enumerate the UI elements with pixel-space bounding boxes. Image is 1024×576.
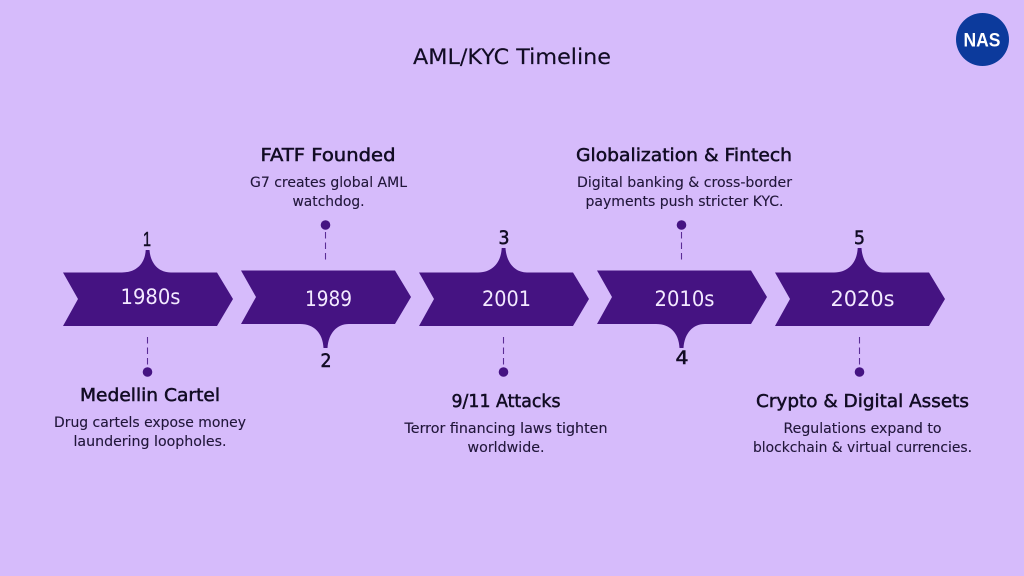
milestone 3: 2001	[403, 228, 608, 456]
arrow 4 with bottom tab	[597, 270, 767, 348]
milestone 2: 1989	[241, 146, 411, 372]
connector 1	[143, 337, 152, 377]
text: Medellin Cartel description: laundering loopholes.	[74, 434, 226, 450]
text: Medellin Cartel description: Drug cartels expose money	[54, 415, 246, 431]
arrow 1 with top tab	[63, 250, 233, 326]
heading: Globalization & Fintech: Globalization & Fintech	[576, 146, 792, 166]
text: FATF description: G7 creates global AML	[250, 175, 407, 191]
text: Crypto description: blockchain & virtual currencies.	[753, 440, 972, 456]
text: Globalization description	[577, 175, 792, 210]
text: Globalization description: payments push stricter KYC.	[586, 194, 784, 210]
heading: Medellin Cartel: Medellin Cartel	[80, 386, 220, 406]
heading: FATF Founded: FATF Founded	[260, 146, 396, 166]
year label 1989: 1989	[305, 287, 352, 311]
heading: Crypto & Digital Assets: Crypto & Digital Assets	[756, 392, 969, 412]
step number 1: 1	[143, 229, 151, 251]
text: Medellin Cartel description	[54, 415, 246, 450]
milestone 4: 2010s	[576, 146, 792, 369]
step number 4: 4	[676, 348, 688, 369]
connector 4	[677, 220, 686, 261]
text: 9/11 description: worldwide.	[468, 440, 544, 456]
connector 3	[499, 337, 508, 377]
step number 2: 2	[320, 351, 332, 372]
connector 5	[855, 337, 864, 377]
year label 2020s: 2020s	[830, 287, 894, 311]
text: Globalization description: Digital banking & cross-border	[577, 175, 792, 191]
title: AML/KYC Timeline	[413, 45, 611, 70]
step number 5: 5	[854, 228, 865, 249]
text: Crypto description	[753, 421, 972, 456]
year label 1980s: 1980s	[120, 285, 180, 309]
year label 2010s: 2010s	[654, 287, 714, 311]
text: 9/11 description	[403, 421, 608, 456]
icon: NAS logo: NAS	[964, 30, 1000, 52]
connector 2	[321, 220, 330, 261]
text: FATF description	[250, 175, 407, 210]
year label 2001: 2001	[482, 287, 531, 311]
milestone 1: 1980s	[54, 229, 246, 450]
text: FATF description: watchdog.	[292, 194, 364, 210]
text: Crypto description: Regulations expand to	[784, 421, 942, 437]
milestone 5: 2020s	[753, 228, 972, 456]
arrow 3 with top tab	[419, 248, 589, 326]
heading: 9/11 Attacks: 9/11 Attacks	[452, 392, 560, 412]
arrow 5 with top tab	[775, 248, 945, 326]
step number 3: 3	[498, 228, 510, 249]
text: 9/11 description: Terror financing laws tighten	[403, 421, 608, 437]
arrow 2 with bottom tab	[241, 270, 411, 348]
icon: NAS logo	[956, 13, 1009, 66]
